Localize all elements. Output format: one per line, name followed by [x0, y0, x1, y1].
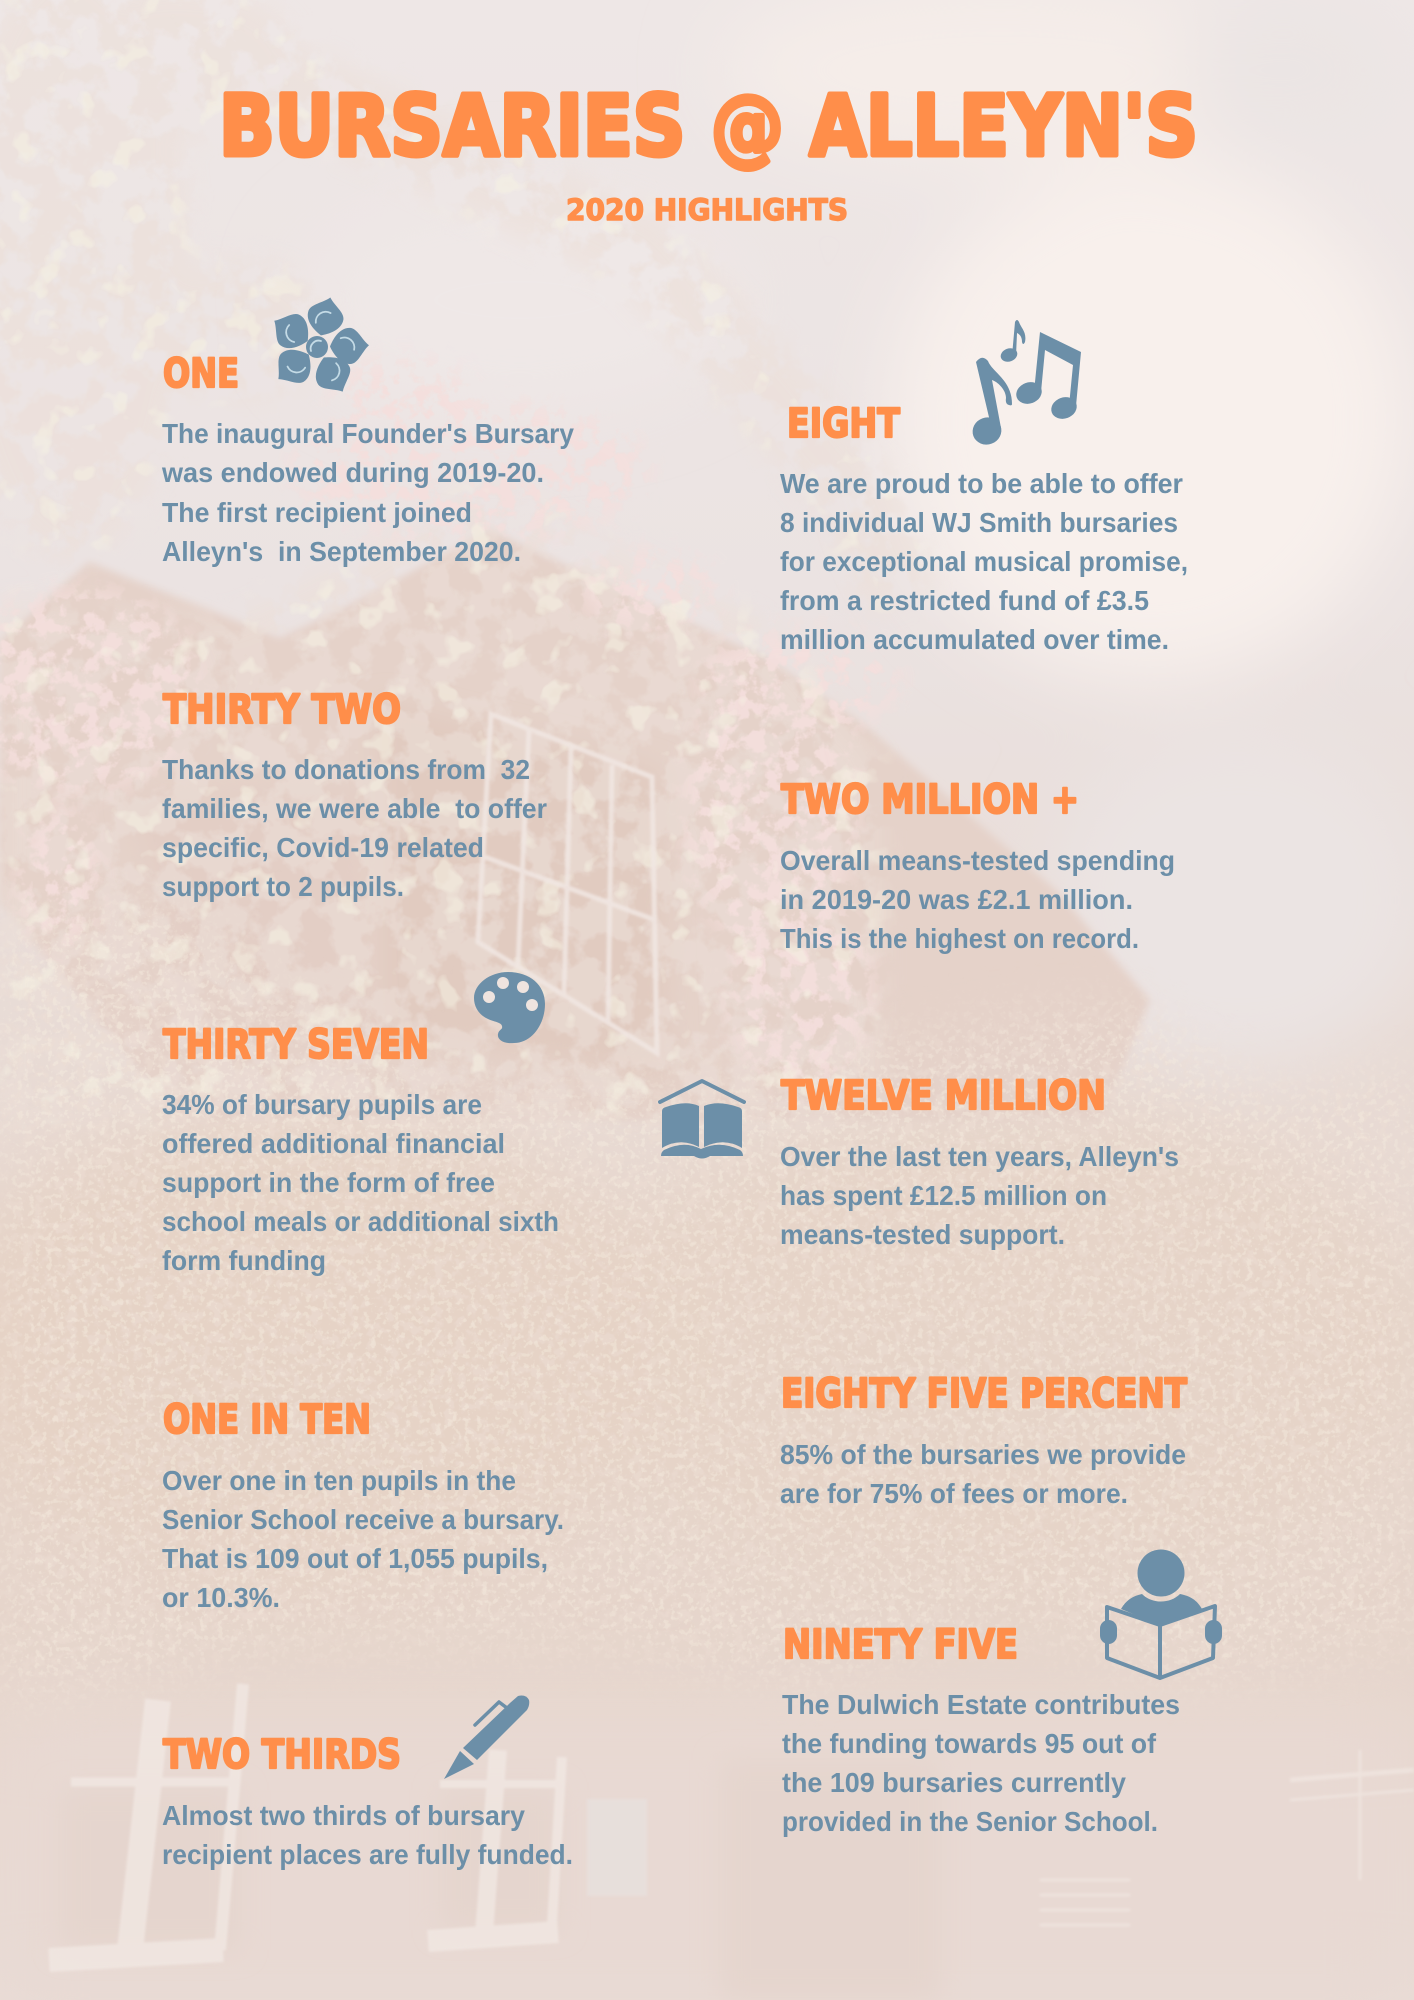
- text: senior school share: or 10.3%.: [162, 1582, 280, 1613]
- text: senior school share: That is 109 out of 1,055 pupils,: [162, 1543, 548, 1574]
- heading: eighty five percent: EIGHTY FIVE PERCENT: [781, 1371, 1188, 1417]
- foliage texture: [2, 922, 1410, 1675]
- text: dulwich estate: The Dulwich Estate contributes: [782, 1689, 1180, 1720]
- text: dulwich estate: [782, 1689, 1180, 1837]
- text: ten year spend: [780, 1141, 1179, 1250]
- heading: eight: EIGHT: [787, 401, 901, 447]
- heading: two thirds: TWO THIRDS: [163, 1732, 401, 1778]
- icon: music notes: [969, 320, 1081, 449]
- heading: one in ten: ONE IN TEN: [163, 1397, 371, 1443]
- text: dulwich estate: the 109 bursaries currently: [782, 1767, 1126, 1798]
- text: senior school share: Over one in ten pupils in the: [162, 1465, 516, 1496]
- text: wj smith bursaries: 8 individual WJ Smith bursaries: [780, 507, 1178, 538]
- text: founder's bursary: was endowed during 2019-20.: [161, 457, 544, 488]
- icon: flower: [265, 293, 370, 400]
- text: ten year spend: Over the last ten years, Alleyn's: [780, 1141, 1179, 1172]
- text: dulwich estate: the funding towards 95 out of: [782, 1728, 1157, 1759]
- text: ten year spend: means-tested support.: [780, 1219, 1065, 1250]
- text: wj smith bursaries: million accumulated over time.: [780, 624, 1169, 655]
- heading: ninety five: NINETY FIVE: [783, 1622, 1018, 1668]
- text: founder's bursary: The first recipient joined: [162, 497, 472, 528]
- panel: twelve million: [780, 1073, 1179, 1250]
- text: free school meals: school meals or additional sixth: [162, 1206, 559, 1237]
- heading: twelve million: TWELVE MILLION: [781, 1073, 1106, 1119]
- text: fully funded places: [162, 1800, 573, 1870]
- text: founder's bursary: Alleyn's in September 2020.: [162, 536, 521, 567]
- text: free school meals: form funding: [162, 1245, 326, 1276]
- text: fully funded places: recipient places are fully funded.: [162, 1839, 573, 1870]
- text: ten year spend: has spent £12.5 million on: [780, 1180, 1107, 1211]
- panel: one: [161, 351, 574, 567]
- text: covid support: support to 2 pupils.: [162, 871, 404, 902]
- panel: thirty two: [162, 687, 547, 902]
- text: senior school share: Senior School receive a bursary.: [162, 1504, 564, 1535]
- blossom and leaf textures: [0, 0, 906, 1120]
- building walls and roof: [0, 530, 1150, 1120]
- panel: eighty five percent: [780, 1371, 1188, 1509]
- text: senior school share: [162, 1465, 564, 1613]
- panel: thirty seven: [162, 1022, 559, 1276]
- text: free school meals: [162, 1089, 559, 1276]
- text: means-tested spending: This is the highest on record.: [780, 923, 1139, 954]
- lower building windows: [60, 1760, 940, 2000]
- text: wj smith bursaries: from a restricted fund of £3.5: [780, 585, 1149, 616]
- text: means-tested spending: Overall means-tested spending: [780, 845, 1175, 876]
- text: free school meals: offered additional financial: [162, 1128, 505, 1159]
- text: fees covered: are for 75% of fees or more.: [780, 1478, 1128, 1509]
- panel: two million: [780, 777, 1175, 954]
- text: covid support: families, we were able to offer: [162, 793, 547, 824]
- text: covid support: [162, 754, 547, 902]
- text: fees covered: [780, 1439, 1186, 1509]
- text: wj smith bursaries: for exceptional musical promise,: [780, 546, 1188, 577]
- text: means-tested spending: [780, 845, 1175, 954]
- icon: person reading: [1100, 1550, 1222, 1678]
- panel: ninety five: [782, 1622, 1180, 1837]
- heading: one: ONE: [163, 351, 239, 397]
- heading: thirty two: THIRTY TWO: [163, 687, 401, 733]
- text: founder's bursary: [161, 418, 574, 567]
- panel: one in ten: [162, 1397, 564, 1613]
- heading: two million: TWO MILLION +: [781, 777, 1079, 823]
- subtitle: 2020 HIGHLIGHTS: [566, 193, 848, 227]
- upper window: [478, 714, 657, 1053]
- text: fully funded places: Almost two thirds of bursary: [162, 1800, 525, 1831]
- icon: palette: [474, 972, 545, 1043]
- text: covid support: Thanks to donations from 32: [162, 754, 530, 785]
- panel: two thirds: [162, 1732, 573, 1870]
- text: wj smith bursaries: [780, 468, 1188, 655]
- heading: thirty seven: THIRTY SEVEN: [163, 1022, 429, 1068]
- icon: pen: [444, 1696, 529, 1779]
- title: BURSARIES @ ALLEYN'S: [219, 77, 1198, 175]
- text: founder's bursary: The inaugural Founder's Bursary: [162, 418, 574, 449]
- panel: eight: [780, 401, 1188, 655]
- text: fees covered: 85% of the bursaries we provide: [780, 1439, 1186, 1470]
- icon: open book: [660, 1081, 744, 1158]
- text: covid support: specific, Covid-19 related: [162, 832, 484, 863]
- text: dulwich estate: provided in the Senior School.: [782, 1806, 1158, 1837]
- text: wj smith bursaries: We are proud to be able to offer: [780, 468, 1183, 499]
- text: free school meals: 34% of bursary pupils are: [162, 1089, 482, 1120]
- text: means-tested spending: in 2019-20 was £2.1 million.: [780, 884, 1133, 915]
- text: free school meals: support in the form of free: [162, 1167, 495, 1198]
